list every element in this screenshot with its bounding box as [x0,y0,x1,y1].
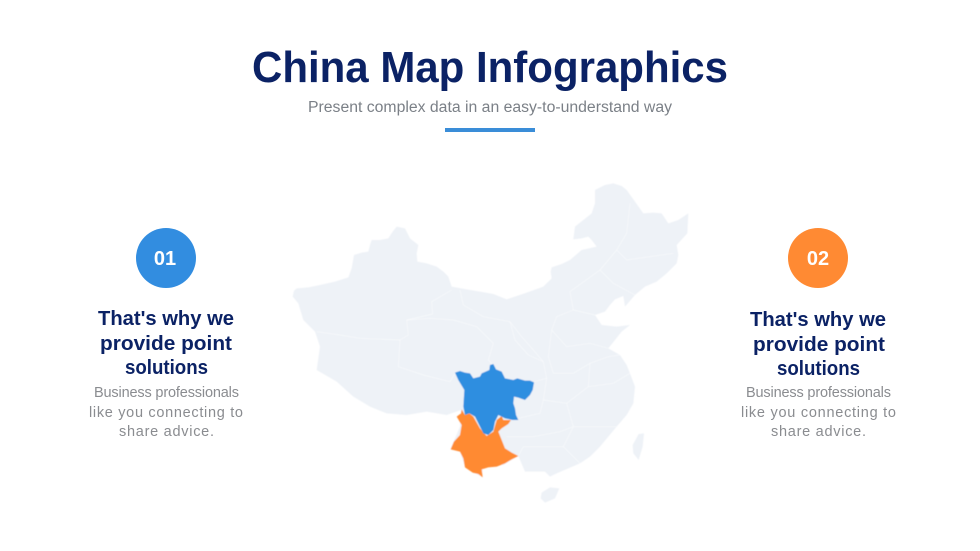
heading: provide point [100,332,232,355]
mainland [293,183,688,477]
body text: like you connecting to [89,405,243,421]
body text: like you connecting to [741,405,896,421]
province borders [317,203,673,463]
heading: solutions [777,357,860,380]
body text: Business professionals [746,385,891,401]
Sichuan highlight [455,364,534,435]
base map [293,183,688,503]
map of China [293,183,688,503]
body text [741,385,896,440]
body text: Business professionals [94,385,239,401]
body text [89,385,243,440]
highlighted provinces [451,364,534,477]
Hainan [541,487,559,503]
title underline [445,128,535,132]
Taiwan [633,433,644,460]
badge 01: 01 [154,248,176,270]
heading [98,307,234,379]
badge 02: 02 [807,248,829,270]
badge 02 [788,228,848,288]
title: China Map Infographics [252,43,728,92]
heading [750,308,886,380]
body text: share advice. [119,424,214,440]
heading: That's why we [98,307,234,330]
Yunnan highlight [451,409,518,477]
heading: That's why we [750,308,886,331]
badge 01 [136,228,196,288]
heading: provide point [753,333,885,356]
left item [89,228,243,440]
subtitle: Present complex data in an easy-to-understand way [308,99,672,116]
body text: share advice. [771,424,866,440]
right item [741,228,896,440]
heading: solutions [125,356,208,379]
